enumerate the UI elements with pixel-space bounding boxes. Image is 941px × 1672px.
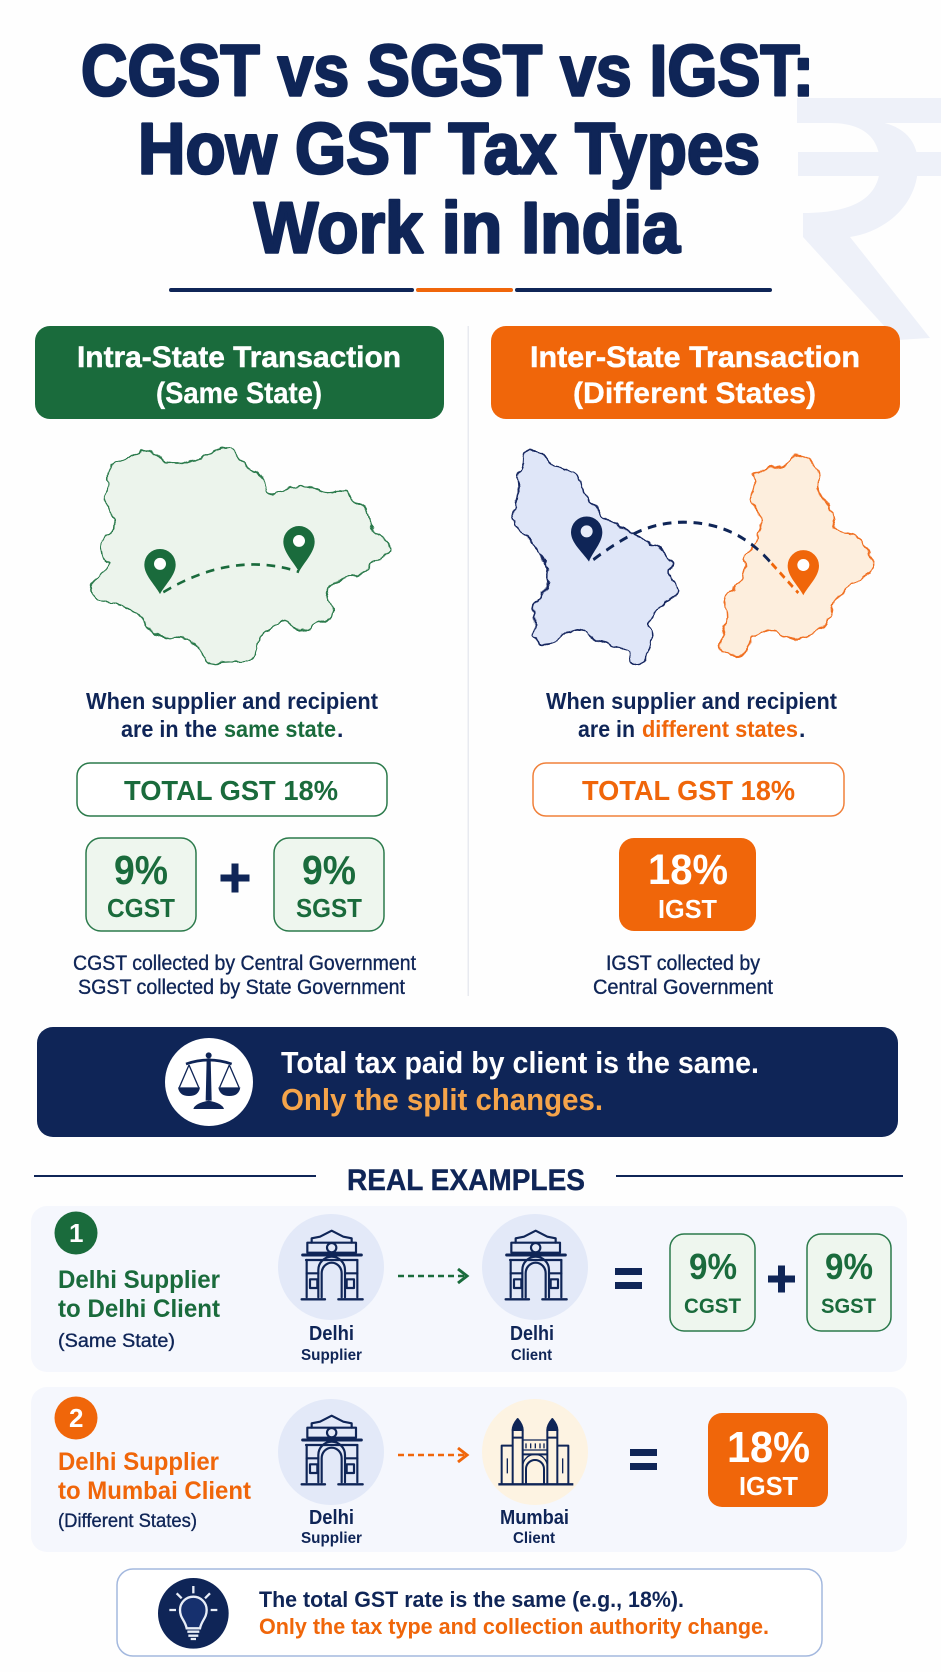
box: 18% IGST [619,838,756,931]
equals sign [630,1449,657,1470]
text: intra-state description: are in the [121,716,217,742]
box: 9% CGST: CGST [684,1295,741,1318]
text: inter-state description [546,688,837,742]
text: example 2 title: to Mumbai Client [58,1477,252,1505]
box: 18% IGST [708,1413,828,1507]
map: two states with pins [514,448,873,665]
label: Delhi supplier: Delhi [309,1507,354,1529]
label: Delhi supplier [301,1507,362,1547]
callout: key takeaway: Only the tax type and collection authority change. [259,1614,769,1639]
text: inter-state description: . [799,716,805,742]
label: Mumbai client [500,1507,569,1547]
badge 1 [54,1212,98,1254]
box: 9% CGST: CGST [107,893,175,923]
box: 9% CGST [670,1234,755,1331]
callout: key takeaway [117,1569,822,1656]
panel: intra-state header [35,326,444,419]
panel: example 1 [31,1206,907,1372]
text: inter-state description: When supplier and recipient [546,688,837,714]
callout: total GST inter-state: TOTAL GST 18% [582,775,795,806]
callout: total GST intra-state: TOTAL GST 18% [124,775,338,806]
plus sign [768,1266,795,1292]
box: 18% IGST: 18% [727,1423,810,1472]
text: example 1 title: (Same State) [58,1331,175,1352]
title: Work in India [254,188,681,268]
icon: light bulb [158,1578,229,1649]
icon: Delhi client [482,1214,588,1320]
panel: inter-state header: Inter-State Transaction [530,341,860,374]
icon: Mumbai client [482,1399,588,1505]
callout: key takeaway: The total GST rate is the same (e.g., 18%). [259,1587,684,1612]
plus sign [220,864,250,892]
text: example 2 title [58,1448,252,1532]
arrow [398,1269,467,1283]
badge 1: 1 [69,1218,83,1248]
text: inter-state collection [593,952,773,999]
panel: example 2 [31,1387,907,1552]
box: 9% SGST [274,838,384,931]
text: example 2 title: Delhi Supplier [58,1448,219,1476]
label: Mumbai client: Mumbai [500,1507,569,1529]
icon: balance scale [178,1052,240,1109]
label: Mumbai client: Client [513,1530,556,1547]
text: example 1 title: to Delhi Client [58,1295,221,1323]
banner: total tax same: Only the split changes. [281,1082,603,1117]
title underline [169,288,772,292]
text: intra-state description: When supplier and recipient [86,688,378,714]
text: intra-state description [86,688,378,742]
badge 2: 2 [69,1403,83,1433]
box: 9% CGST: 9% [114,847,168,893]
text: inter-state collection: Central Government [593,976,773,999]
box: 18% IGST: IGST [739,1471,798,1501]
label: Delhi supplier: Supplier [301,1530,362,1547]
icon: Delhi supplier [278,1214,384,1320]
text: example 1 title: Delhi Supplier [58,1266,220,1294]
box: 9% SGST: SGST [821,1295,876,1318]
label: Delhi supplier: Delhi [309,1323,354,1345]
equals sign [615,1268,642,1289]
callout: total GST inter-state [533,763,844,816]
box: 9% CGST: 9% [689,1246,737,1287]
label: Delhi client: Client [511,1347,553,1364]
text: intra-state collection: CGST collected by Central Government [73,952,416,975]
text: inter-state description: are in [578,716,635,742]
callout: total GST intra-state [77,763,387,816]
map: single state with two pins [91,447,390,663]
title: CGST vs SGST vs IGST: [81,32,814,112]
label: Delhi supplier [301,1323,362,1364]
banner: total tax same [37,1027,898,1137]
banner: total tax same: Total tax paid by client is the same. [281,1045,759,1080]
label: Delhi client [510,1323,554,1364]
box: 9% SGST: 9% [302,847,356,893]
text: inter-state collection: IGST collected by [606,952,760,975]
box: 18% IGST: 18% [648,846,728,894]
title [81,32,814,268]
panel: intra-state header: (Same State) [156,377,322,410]
label: Delhi client: Delhi [510,1323,554,1345]
box: 9% CGST [86,838,196,931]
panel: intra-state header: Intra-State Transaction [77,341,401,374]
badge 2 [54,1396,98,1440]
watermark: rupee symbol [797,98,941,340]
text: example 2 title: (Different States) [58,1511,197,1532]
text: intra-state description: . [337,716,343,742]
text: inter-state description: different states [642,716,798,742]
heading: real examples: REAL EXAMPLES [347,1164,585,1197]
box: 9% SGST [807,1234,891,1331]
icon: Delhi supplier [278,1399,384,1505]
panel: inter-state header: (Different States) [573,377,816,410]
label: Delhi supplier: Supplier [301,1347,362,1364]
text: intra-state collection [73,952,416,999]
title: How GST Tax Types [138,110,760,190]
text: intra-state collection: SGST collected by State Government [78,976,405,999]
panel: inter-state header [491,326,900,419]
box: 9% SGST: 9% [825,1246,873,1287]
text: example 1 title [58,1266,221,1352]
box: 9% SGST: SGST [296,893,362,923]
box: 18% IGST: IGST [658,894,717,924]
arrow [398,1448,467,1462]
text: intra-state description: same state [224,716,336,742]
